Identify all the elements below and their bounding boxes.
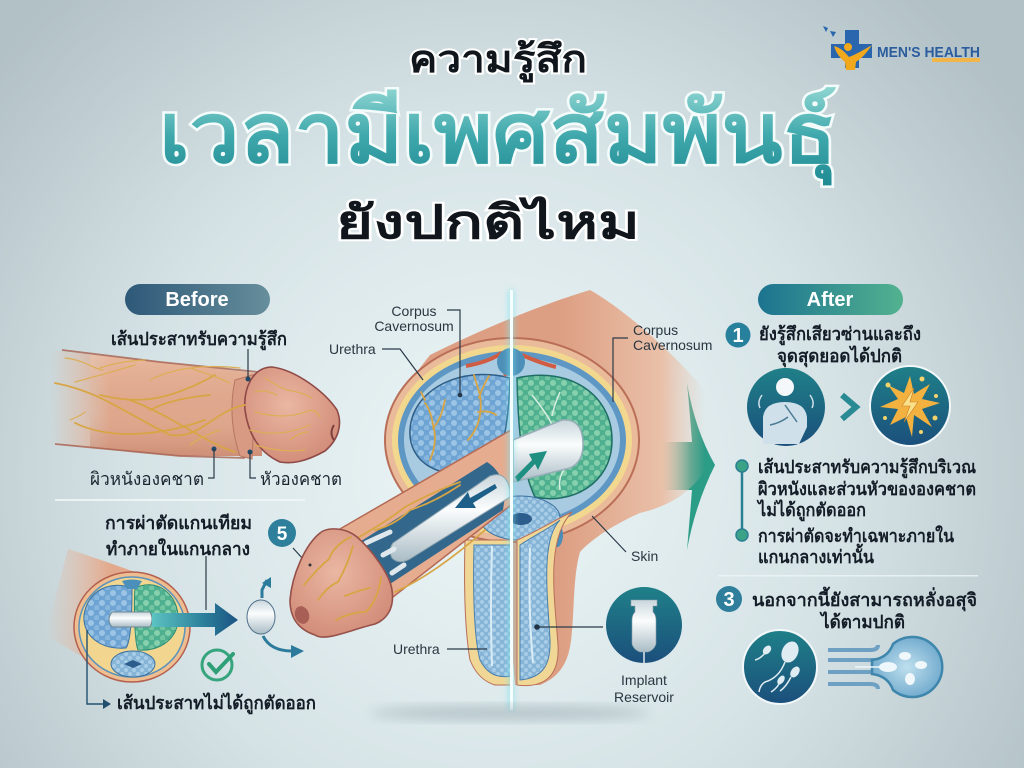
point 3: นอกจากนี้ยังสามารถหลั่งอสุจิ [752,586,977,612]
before pill: Before [165,289,229,311]
panel: central cross-section [290,290,712,720]
label: urethra lower: Urethra [393,641,440,657]
label: corpus cavernosum left: Cavernosum [374,318,454,334]
leader lines [208,349,256,478]
label: glans: หัวองคชาต [260,469,342,489]
label: skin: Skin [631,548,658,564]
point 3 [716,586,977,632]
point 2 bullets: แกนกลางเท่านั้น [758,543,875,567]
logo: MEN'S HEALTH [877,45,980,61]
icon: person feeling sensation [747,368,825,446]
point 2 bullets [736,457,976,567]
icon: flow into chamber [828,637,942,697]
point 2 bullets: การผ่าตัดจะทำเฉพาะภายใน [758,525,955,546]
point 2 bullets: ผิวหนังและส่วนหัวขององคชาต [758,479,976,499]
point 1: ยังรู้สึกเสียวซ่านและถึง [759,324,921,346]
after pill [758,284,903,315]
title [159,39,837,248]
point 1 [726,322,921,368]
point 2 bullets: ไม่ได้ถูกตัดออก [756,499,866,522]
procedure text [105,513,252,559]
panel: after [716,284,978,704]
divider glow [508,290,514,710]
note arrow [87,630,111,709]
implant cylinder right [513,420,583,482]
title line 1: ความรู้สึก [409,39,587,83]
body skin [395,290,705,685]
point 1: 1 [732,325,744,347]
procedure text: การผ่าตัดแกนเทียม [105,513,252,533]
icon: green check [202,650,233,680]
point 3: ได้ตามปกติ [819,611,905,632]
icon: cells [743,630,817,704]
callout dots [212,376,252,454]
label: corpus cavernosum right: Cavernosum [633,337,712,353]
label: shaft skin: ผิวหนังองคชาต [90,469,204,489]
arrow to pump [152,603,238,636]
badge 5 [268,519,303,559]
procedure text: ทำภายในแกนกลาง [106,538,250,559]
point 2 bullets: เส้นประสาทรับความรู้สึกบริเวณ [758,457,976,479]
section left half [384,337,510,686]
point 1: จุดสุดยอดได้ปกติ [777,345,902,368]
heading: sensory nerves: เส้นประสาทรับความรู้สึก [111,329,287,351]
glans cutaway [290,529,393,637]
icon: spark burst [870,366,950,446]
label: urethra upper: Urethra [329,341,376,357]
badge 5: 5 [277,524,288,545]
illustration: external anatomy with nerves [50,350,340,463]
title line 3: ยังปกติไหม [336,196,640,248]
label: corpus cavernosum right: Corpus [633,322,678,338]
before pill [125,284,270,315]
implant reservoir callout: Implant [621,672,667,688]
label: corpus cavernosum left: Corpus [391,303,437,319]
point 3: 3 [723,589,735,611]
note text: เส้นประสาทไม่ได้ถูกตัดออก [117,692,316,715]
panel: procedure [45,513,316,715]
panel: before [50,284,342,489]
section right half [513,337,640,686]
icon: chevron [842,395,856,419]
after pill: After [807,289,854,311]
pump [247,577,304,658]
logo [823,26,980,70]
ground shadow [370,706,650,720]
implant reservoir callout [534,587,682,705]
mini cross section [45,549,190,682]
implant reservoir callout: Reservoir [614,689,674,705]
penile shaft section [333,430,511,597]
title line 2: เวลามีเพศสัมพันธุ์ [159,86,837,186]
big transition arrow [650,383,715,550]
